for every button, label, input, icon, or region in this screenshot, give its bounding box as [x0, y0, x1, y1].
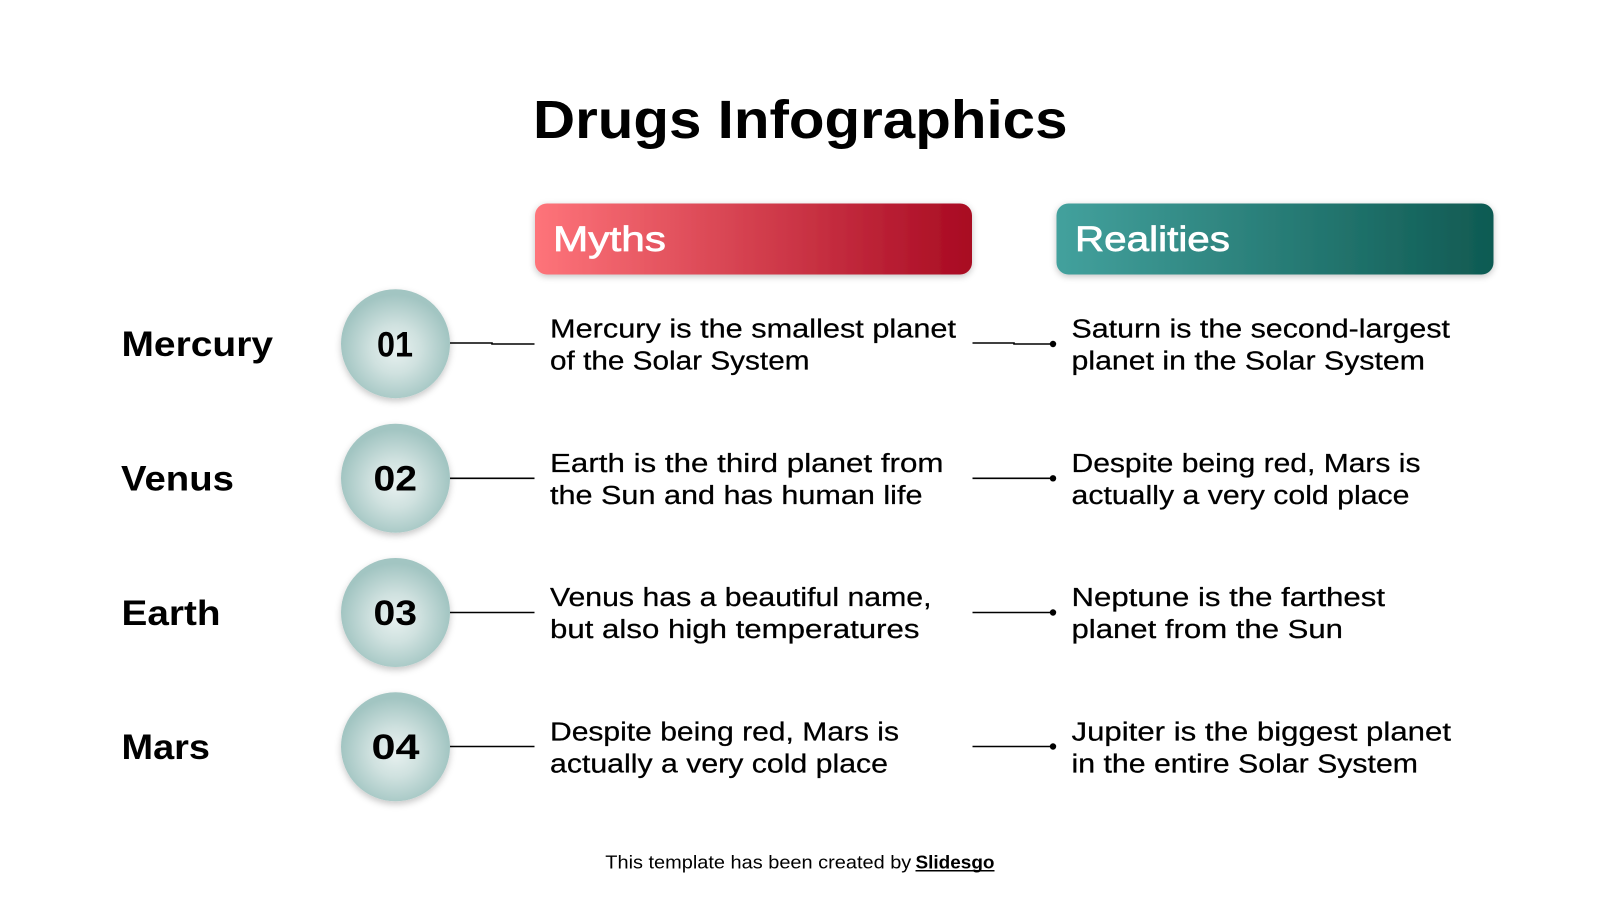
myth text 1 [550, 316, 956, 376]
title: Drugs Infographics [533, 91, 1068, 150]
connector: circle to myth [450, 612, 534, 614]
reality text 3: Neptune is the farthest [1072, 584, 1385, 612]
number circle 02: 02 [374, 460, 417, 499]
row 3: Earth [122, 558, 1385, 667]
reality text 3 [1072, 584, 1385, 644]
reality text 2 [1072, 450, 1420, 510]
footer credit: This template has been created by [605, 851, 912, 872]
reality text 4: in the entire Solar System [1072, 751, 1418, 779]
myth text 4: actually a very cold place [550, 751, 888, 779]
reality text 2: Despite being red, Mars is [1072, 450, 1420, 478]
myth text 4 [550, 719, 899, 779]
reality text 1 [1072, 316, 1450, 376]
connector: circle to myth [450, 343, 534, 344]
reality text 1: planet in the Solar System [1072, 348, 1425, 376]
myth text 3: Venus has a beautiful name, [550, 584, 932, 612]
reality text 4 [1072, 719, 1451, 779]
row 2: Venus [121, 424, 1420, 533]
header: Myths: Myths [553, 220, 666, 259]
myth text 3 [550, 584, 932, 644]
myth text 3: but also high temperatures [550, 616, 920, 644]
reality text 4: Jupiter is the biggest planet [1072, 719, 1451, 747]
reality text 1: Saturn is the second-largest [1072, 316, 1450, 344]
reality text 2: actually a very cold place [1072, 482, 1410, 510]
connector: myth to reality with dot [972, 341, 1056, 347]
connector: circle to myth [450, 746, 534, 748]
number circle 04 [341, 692, 450, 801]
label: Mercury: Mercury [122, 325, 274, 364]
number circle 01 [341, 289, 450, 398]
myth text 1: of the Solar System [550, 348, 810, 376]
myth text 4: Despite being red, Mars is [550, 719, 899, 747]
reality text 3: planet from the Sun [1072, 616, 1343, 644]
connector: myth to reality with dot [972, 743, 1056, 750]
myth text 2: Earth is the third planet from [550, 450, 944, 478]
connector: circle to myth [450, 477, 534, 479]
header: Realities [1056, 204, 1494, 274]
number circle 03 [341, 558, 450, 667]
myth text 1: Mercury is the smallest planet [550, 316, 956, 344]
row 4: Mars [122, 692, 1451, 801]
myth text 2 [550, 450, 944, 510]
number circle 04: 04 [372, 728, 420, 767]
myth text 2: the Sun and has human life [550, 482, 922, 510]
number circle 03: 03 [374, 594, 417, 633]
label: Mars: Mars [122, 728, 210, 767]
label: Venus: Venus [121, 460, 234, 499]
label: Earth: Earth [122, 594, 220, 633]
number circle 01: 01 [377, 326, 413, 365]
header: Realities: Realities [1075, 220, 1230, 259]
connector: myth to reality with dot [972, 475, 1056, 481]
footer credit: Slidesgo [916, 851, 994, 872]
row 1: Mercury [122, 289, 1450, 398]
number circle 02 [341, 424, 450, 533]
connector: myth to reality with dot [972, 609, 1056, 616]
header: Myths [535, 204, 972, 274]
